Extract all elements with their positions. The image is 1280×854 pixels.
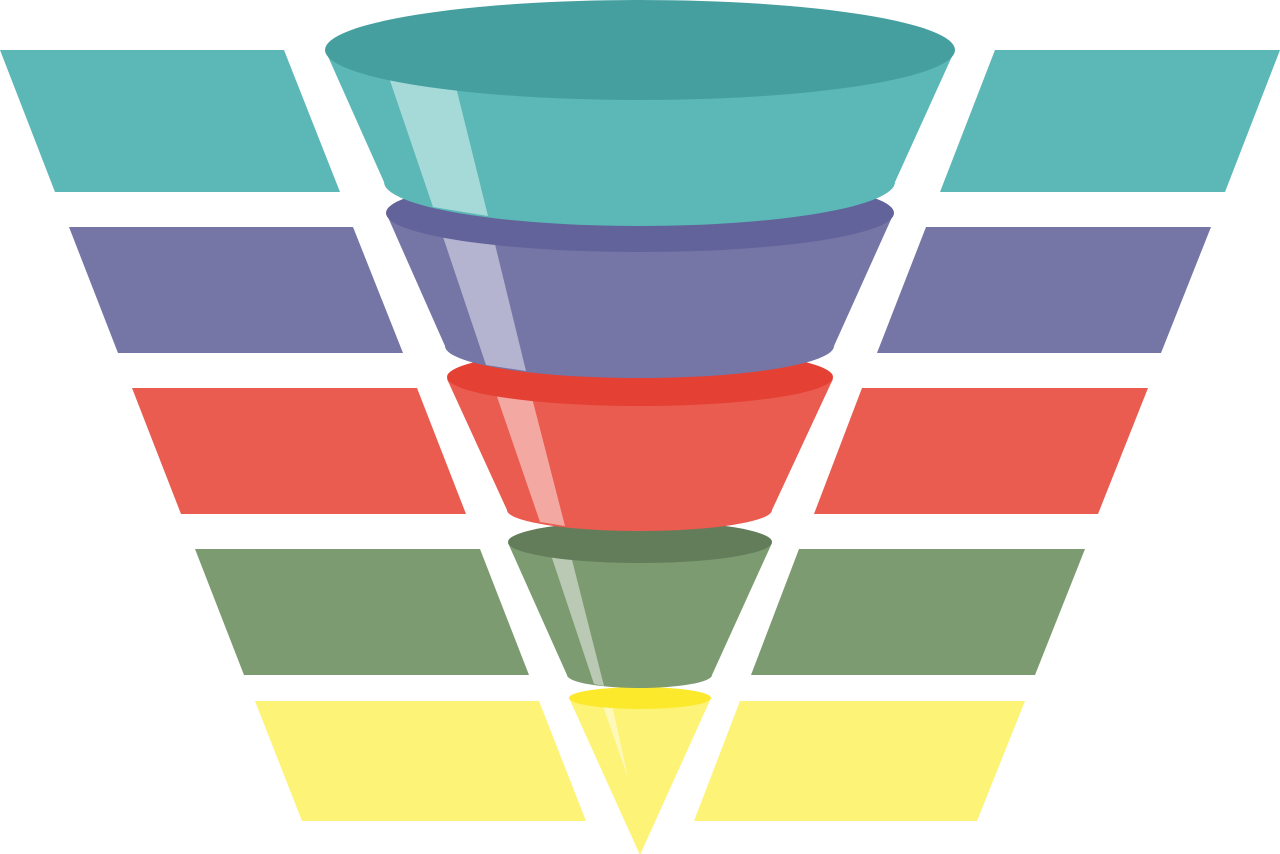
panel: yellow left xyxy=(255,701,586,821)
panel: purple right xyxy=(877,227,1211,353)
panel: teal left xyxy=(0,50,340,192)
funnel tier: purple xyxy=(386,174,894,378)
panel: purple left xyxy=(69,227,403,353)
panel: teal right xyxy=(940,50,1280,192)
panel: green right xyxy=(751,549,1085,675)
panel: red right xyxy=(814,388,1148,514)
funnel tier: teal xyxy=(325,0,955,226)
panel: yellow right xyxy=(694,701,1025,821)
panel: red left xyxy=(132,388,466,514)
funnel tier: yellow xyxy=(569,687,711,854)
panel: green left xyxy=(195,549,529,675)
funnel tier: green xyxy=(508,521,772,688)
funnel tier: red xyxy=(447,348,833,531)
